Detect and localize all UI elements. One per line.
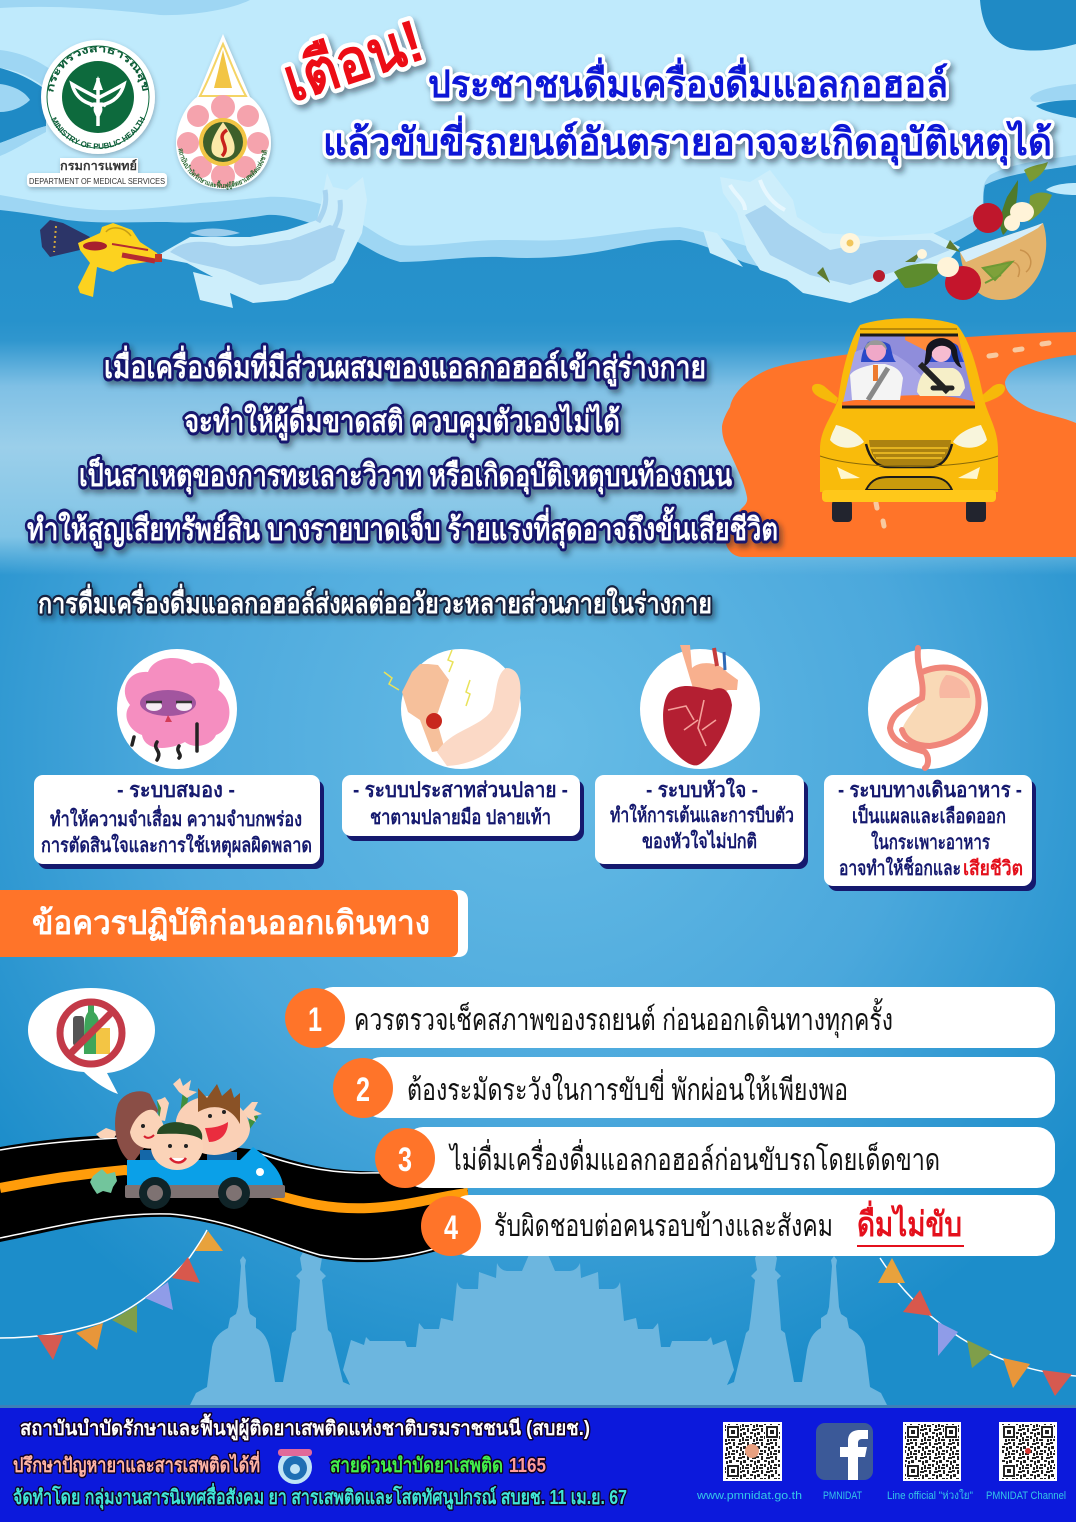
logo: PMNIDAT: สถาบันบำบัดรักษาและฟื้นฟูผู้ติดยาเสพติดแห่งชาติ <box>178 148 268 190</box>
heading: warning: เตือน! <box>275 7 431 114</box>
QR code: channel <box>1000 1423 1056 1480</box>
QR captions <box>696 1489 1066 1502</box>
QR captions: Line official "ห่วงใย" <box>887 1489 973 1502</box>
card: digestive: เสียชีวิต <box>963 857 1023 880</box>
QR captions: PMNIDAT <box>823 1490 862 1502</box>
step 3: 3 <box>398 1141 412 1179</box>
card: heart: ของหัวใจไม่ปกติ <box>642 829 757 853</box>
icon: heart <box>640 645 760 769</box>
QR captions: PMNIDAT Channel <box>986 1490 1066 1502</box>
card: brain: ทำให้ความจำเสื่อม ความจำบกพร่อง <box>50 804 302 831</box>
step 4: รับผิดชอบต่อคนรอบข้างและสังคม <box>494 1210 833 1243</box>
intro paragraph: จะทำให้ผู้ดื่มขาดสติ ควบคุมตัวเองไม่ได้ <box>184 399 620 441</box>
step 4 <box>421 1195 1055 1256</box>
step 2: 2 <box>356 1071 370 1109</box>
step 4: ดื่มไม่ขับ <box>857 1200 962 1244</box>
temple silhouette <box>189 1250 888 1407</box>
logo: Ministry of Public Health: กรมการแพทย์ <box>60 159 137 173</box>
step 4: 4 <box>444 1209 458 1247</box>
intro paragraph <box>27 345 778 549</box>
card: brain <box>34 775 324 869</box>
footer text: hotline number: 1165 <box>509 1455 546 1477</box>
subheading: organs: การดื่มเครื่องดื่มแอลกอฮอล์ส่งผลต่ออวัยวะหลายส่วนภายในร่างกาย <box>38 583 712 619</box>
footer text: institute: สถาบันบำบัดรักษาและฟื้นฟูผู้ติดยาเสพติดแห่งชาติบรมราชชนนี (สบยช.) <box>20 1413 590 1442</box>
water splash left <box>160 173 367 308</box>
icon: nerve hand and arm <box>384 649 521 769</box>
card: digestive: - ระบบทางเดินอาหาร - <box>838 779 1022 802</box>
intro paragraph: ทำให้สูญเสียทรัพย์สิน บางรายบาดเจ็บ ร้ายแรงที่สุดอาจถึงขั้นเสียชีวิต <box>27 506 778 549</box>
intro paragraph: เป็นสาเหตุของการทะเลาะวิวาท หรือเกิดอุบัติเหตุบนท้องถนน <box>79 456 732 495</box>
icon: brain <box>117 649 237 769</box>
logo: Ministry of Public Health: กระทรวงสาธารณสุข <box>48 46 148 92</box>
footer <box>0 1405 1076 1522</box>
QR code: Line <box>904 1423 960 1480</box>
step 1: ควรตรวจเช็คสภาพของรถยนต์ ก่อนออกเดินทางทุกครั้ง <box>354 998 893 1039</box>
icon: hotline phone <box>278 1449 312 1484</box>
icon: family in blue car <box>90 1078 285 1209</box>
banner: before travelling <box>0 890 468 957</box>
icon: speech bubble no alcohol <box>28 988 155 1094</box>
title <box>323 57 1052 166</box>
QR captions: www.pmnidat.go.th <box>696 1490 802 1502</box>
step 3: ไม่ดื่มเครื่องดื่มแอลกอฮอล์ก่อนขับรถโดยเด็ดขาด <box>448 1139 940 1177</box>
logo: Ministry of Public Health <box>26 40 170 192</box>
step 1 <box>285 987 1055 1048</box>
logo: Ministry of Public Health: MINISTRY OF PUBLIC HEALTH <box>51 116 145 149</box>
card: brain: - ระบบสมอง - <box>117 779 235 802</box>
card: heart: - ระบบหัวใจ - <box>646 777 758 802</box>
step 3 <box>375 1127 1055 1188</box>
title: ประชาชนดื่มเครื่องดื่มแอลกอฮอล์ <box>428 57 948 106</box>
title: แล้วขับขี่รถยนต์อันตรายอาจจะเกิดอุบัติเหตุได้ <box>323 115 1052 166</box>
step 2 <box>333 1057 1055 1118</box>
card: digestive: อาจทำให้ช็อกและ <box>839 855 961 880</box>
card: heart <box>595 775 808 869</box>
logo: Ministry of Public Health: DEPARTMENT OF MEDICAL SERVICES <box>29 177 165 186</box>
bunting left <box>0 1230 223 1360</box>
icon: water gun <box>40 220 162 297</box>
step 1: 1 <box>308 1001 322 1039</box>
step 2: ต้องระมัดระวังในการขับขี่ พักผ่อนให้เพียงพอ <box>407 1069 848 1107</box>
footer text: hotline: สายด่วนบำบัดยาเสพติด <box>330 1455 503 1477</box>
card: heart: ทำให้การเต้นและการบีบตัว <box>610 803 794 827</box>
banner: before travelling: ข้อควรปฏิบัติก่อนออกเดินทาง <box>32 904 430 941</box>
footer text: consult: ปรึกษาปัญหายาและสารเสพติดได้ที่ <box>13 1450 260 1477</box>
card: peripheral nerves: - ระบบประสาทส่วนปลาย - <box>353 779 568 802</box>
card: peripheral nerves <box>342 775 584 841</box>
road <box>0 1135 468 1262</box>
icon: facebook <box>816 1423 873 1480</box>
header water background <box>0 0 1076 276</box>
icon: flower bowl <box>817 162 1052 300</box>
road illustration: orange road <box>722 332 1076 557</box>
logo: PMNIDAT <box>174 34 274 194</box>
card: digestive: เป็นแผลและเลือดออก <box>852 803 1006 828</box>
card: digestive: ในกระเพาะอาหาร <box>871 830 990 854</box>
footer text: credits: จัดทำโดย กลุ่มงานสารนิเทศสื่อสังคม ยา สารเสพติดและโสตทัศนูปกรณ์ สบยช. 11 เม.ย. 67 <box>13 1482 627 1511</box>
card: brain: การตัดสินใจและการใช้เหตุผลผิดพลาด <box>41 833 312 858</box>
water splash right <box>703 170 960 303</box>
bunting right <box>878 1258 1076 1396</box>
icon: stomach <box>868 648 988 769</box>
icon: yellow car <box>812 318 1005 522</box>
card: peripheral nerves: ชาตามปลายมือ ปลายเท้า <box>370 806 551 829</box>
card: digestive <box>824 775 1036 891</box>
intro paragraph: เมื่อเครื่องดื่มที่มีส่วนผสมของแอลกอฮอล์เข้าสู่ร่างกาย <box>104 345 706 387</box>
QR code: website <box>724 1423 781 1480</box>
